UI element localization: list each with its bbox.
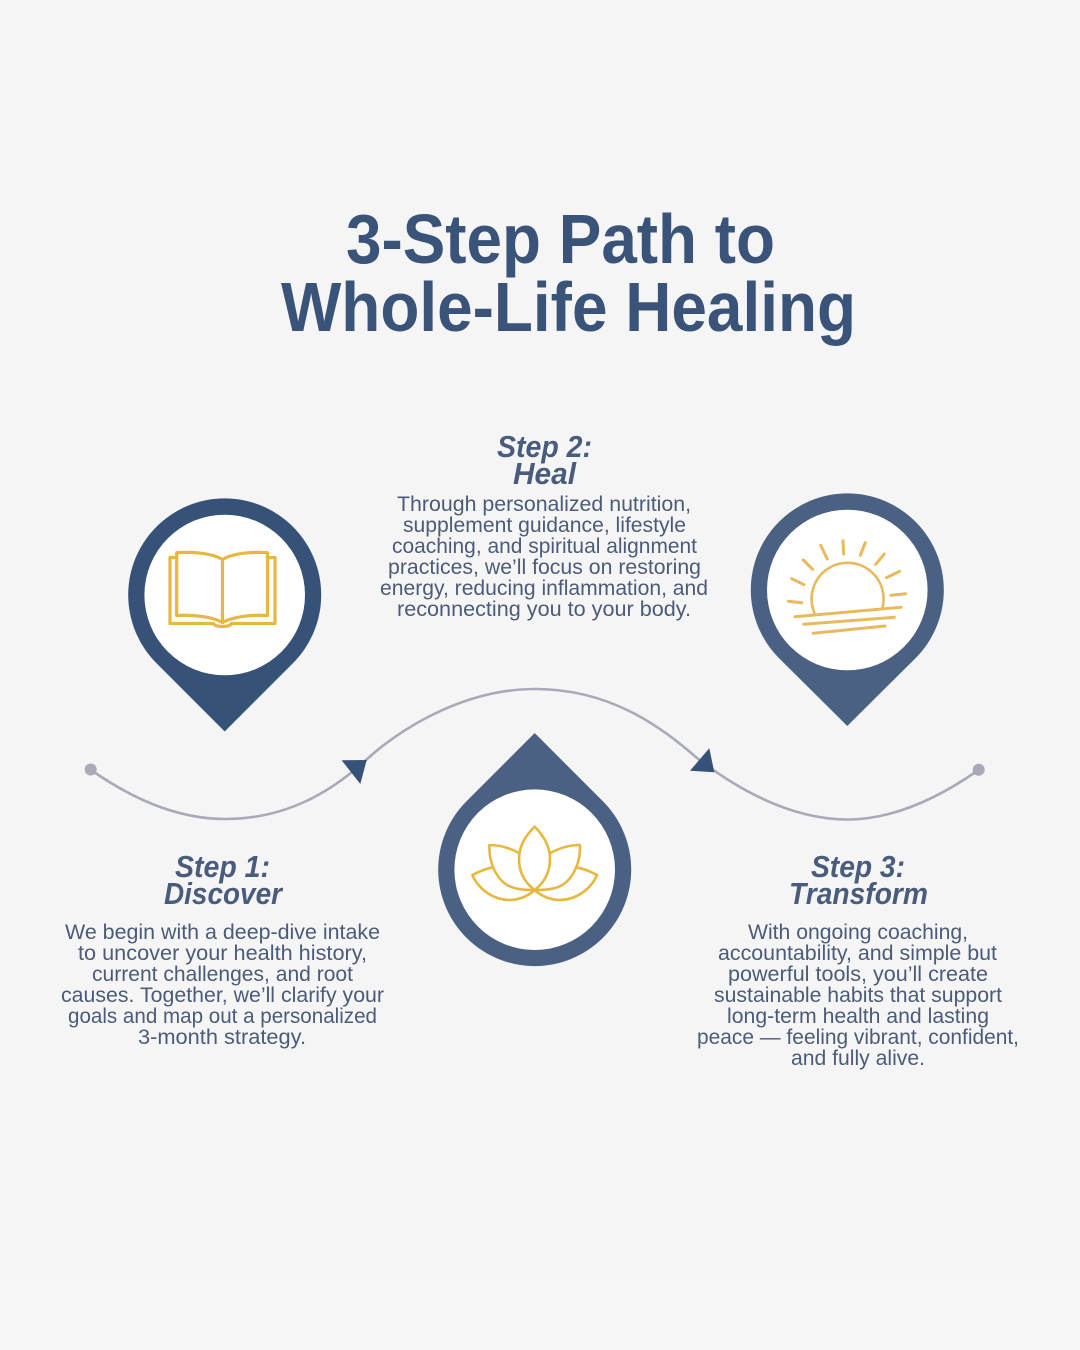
heading: step 2	[497, 429, 592, 491]
body: step 2: energy, reducing inflammation, and	[380, 576, 708, 600]
body: step 3: sustainable habits that support	[714, 983, 1002, 1007]
body: step 2: practices, we’ll focus on restoring	[388, 555, 701, 579]
heading: step 1: Step 1:	[175, 849, 270, 884]
body: step 1: 3-month strategy.	[138, 1025, 306, 1049]
body: step 3: With ongoing coaching,	[748, 920, 968, 944]
pin: step 2 lotus	[438, 733, 631, 966]
pin: step 1 book	[128, 498, 321, 732]
body: step 2	[380, 492, 708, 621]
body: step 1: current challenges, and root	[92, 962, 353, 986]
text block: step 2	[380, 429, 708, 621]
body: step 1: causes. Together, we’ll clarify your	[61, 983, 384, 1007]
arrow: toward step 2	[342, 760, 367, 784]
heading: step 2: Heal	[513, 456, 577, 491]
body: step 1: We begin with a deep-dive intake	[65, 920, 380, 944]
body: step 3	[697, 920, 1019, 1070]
icon: sunrise	[788, 541, 906, 633]
text block: step 3	[697, 849, 1019, 1070]
heading: step 3: Step 3:	[811, 849, 905, 884]
body: step 2: Through personalized nutrition,	[397, 492, 691, 516]
start dot	[85, 764, 97, 776]
body: step 1: goals and map out a personalized	[68, 1004, 377, 1028]
body: step 1: to uncover your health history,	[78, 941, 367, 965]
body: step 3: and fully alive.	[791, 1046, 925, 1070]
title: Whole-Life Healing	[281, 268, 856, 346]
heading: step 1	[164, 849, 284, 911]
body: step 2: supplement guidance, lifestyle	[403, 513, 686, 537]
heading: step 3: Transform	[789, 876, 928, 911]
heading: step 2: Step 2:	[497, 429, 592, 464]
title: 3-Step Path to	[346, 200, 775, 278]
body: step 3: long-term health and lasting	[727, 1004, 989, 1028]
connecting path	[85, 689, 985, 820]
text block: step 1	[61, 849, 384, 1049]
pin: step 3 sunrise	[751, 493, 944, 726]
heading: step 3	[789, 849, 928, 911]
title	[281, 200, 856, 346]
icon: lotus	[472, 827, 597, 900]
heading: step 1: Discover	[164, 876, 284, 911]
arrow: toward step 3	[690, 748, 714, 772]
end dot	[973, 764, 985, 776]
icon: open book	[170, 552, 275, 626]
body: step 3: peace — feeling vibrant, confident,	[697, 1025, 1019, 1049]
body: step 2: reconnecting you to your body.	[397, 597, 691, 621]
body: step 1	[61, 920, 384, 1049]
body: step 2: coaching, and spiritual alignment	[392, 534, 697, 558]
body: step 3: accountability, and simple but	[718, 941, 997, 965]
body: step 3: powerful tools, you’ll create	[728, 962, 988, 986]
